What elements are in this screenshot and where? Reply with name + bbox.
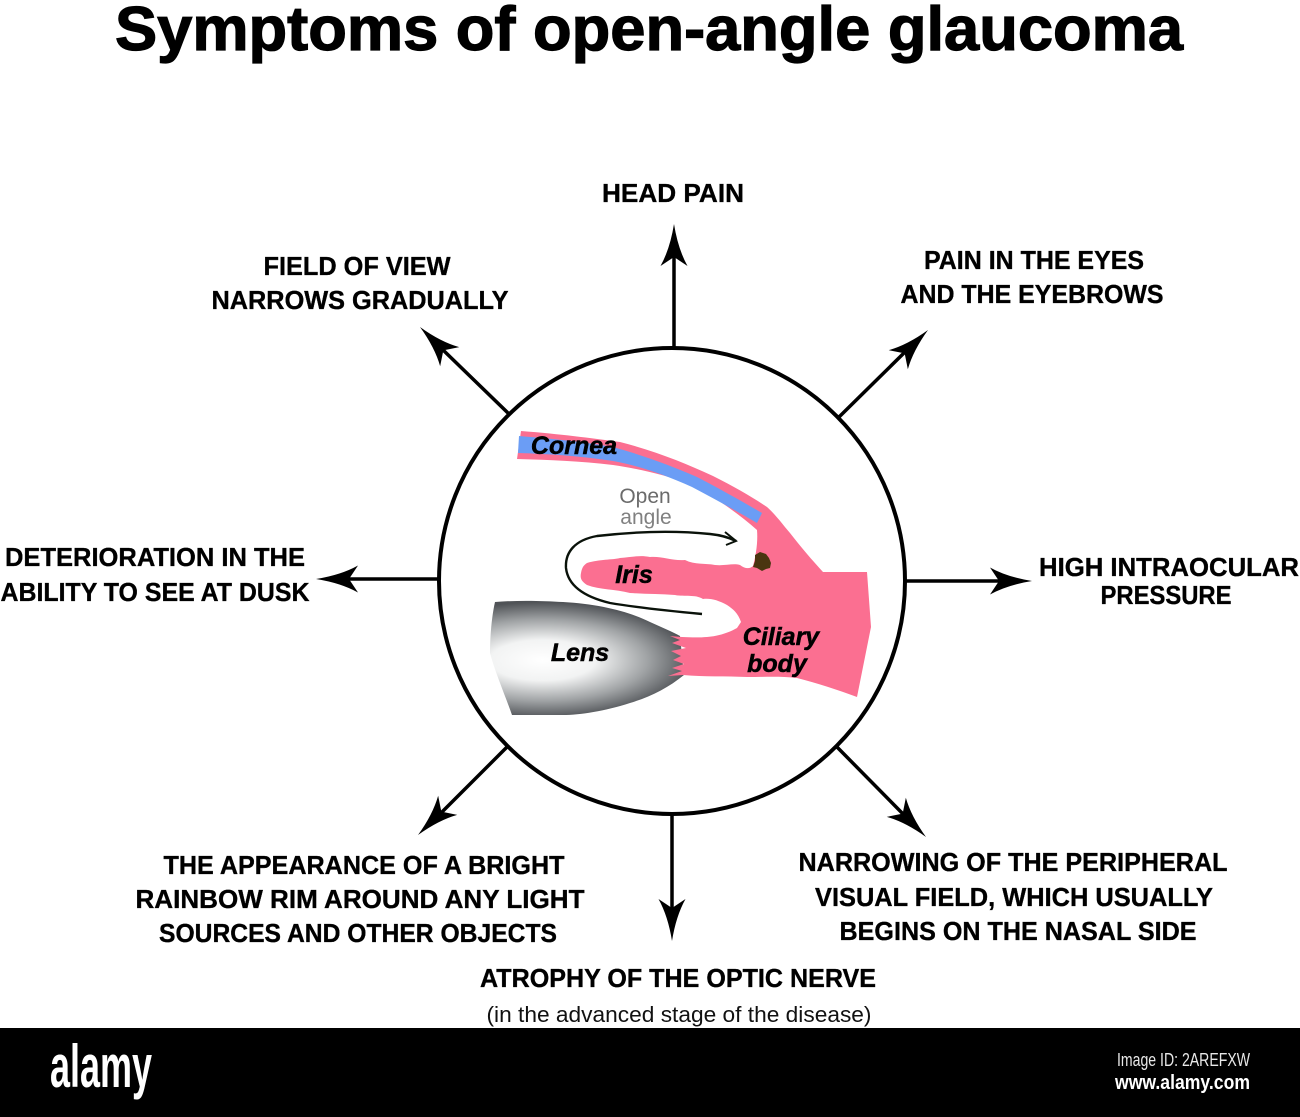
label: Lens: Lens <box>551 639 609 667</box>
label: Ciliary body: Ciliary <box>743 623 820 651</box>
label: Ciliary body: body <box>747 650 808 678</box>
label: peripheral narrowing <box>798 847 1228 946</box>
footer bar <box>0 1028 1300 1117</box>
label: peripheral narrowing: BEGINS ON THE NASAL SIDE <box>840 916 1196 946</box>
label: peripheral narrowing: VISUAL FIELD, WHICH USUALLY <box>815 882 1213 912</box>
alamy logo: alamy <box>50 1033 152 1100</box>
label: Iris: Iris <box>615 561 653 589</box>
trabecular blockage <box>753 552 771 571</box>
lens <box>490 601 684 715</box>
label: pain in the eyes: PAIN IN THE EYES <box>924 245 1144 275</box>
label: rainbow rim <box>136 850 585 948</box>
label: head pain: HEAD PAIN <box>602 178 744 208</box>
central circle <box>439 348 905 814</box>
arrow: right <box>905 568 1032 594</box>
label: deterioration at dusk <box>0 542 310 607</box>
arrow: left <box>316 566 439 592</box>
label: Cornea: Cornea <box>531 432 617 460</box>
label: rainbow rim: SOURCES AND OTHER OBJECTS <box>159 918 557 948</box>
label: rainbow rim: THE APPEARANCE OF A BRIGHT <box>164 850 565 880</box>
eye anatomy diagram <box>490 431 871 715</box>
label: rainbow rim: RAINBOW RIM AROUND ANY LIGHT <box>136 884 585 914</box>
label: pain in the eyes <box>900 245 1164 309</box>
label: high intraocular pressure: PRESSURE <box>1100 580 1232 610</box>
arrow: lower left <box>408 747 507 845</box>
arrow: upper right <box>838 320 938 418</box>
label: peripheral narrowing: NARROWING OF THE PERIPHERAL <box>798 847 1228 877</box>
label: field of view: NARROWS GRADUALLY <box>212 285 508 315</box>
arrow: down <box>658 815 686 941</box>
cornea blue layer <box>518 436 762 523</box>
label: Open angle <box>619 485 672 529</box>
label: Ciliary body <box>743 623 820 678</box>
open angle arrow <box>566 532 736 614</box>
label: Open angle: Open <box>619 485 671 508</box>
arrow: upper left <box>410 317 509 414</box>
label: Open angle: angle <box>620 506 672 529</box>
arrow: up <box>660 224 688 348</box>
arrow: lower right <box>836 746 936 847</box>
label: field of view <box>212 251 508 315</box>
label: field of view: FIELD OF VIEW <box>264 251 451 281</box>
label: deterioration at dusk: DETERIORATION IN THE <box>5 542 305 572</box>
label: optic nerve atrophy <box>480 963 876 1027</box>
label: optic nerve atrophy: (in the advanced stage of the disease) <box>486 1002 872 1027</box>
ciliary body, iris and cornea tissue <box>517 431 871 697</box>
label: deterioration at dusk: ABILITY TO SEE AT DUSK <box>0 577 310 607</box>
label: pain in the eyes: AND THE EYEBROWS <box>900 279 1164 309</box>
image id: Image ID: 2AREFXW <box>1117 1050 1250 1070</box>
website: www.alamy.com <box>1114 1072 1250 1094</box>
label: high intraocular pressure <box>1039 552 1299 610</box>
label: optic nerve atrophy: ATROPHY OF THE OPTIC NERVE <box>480 963 876 993</box>
label: high intraocular pressure: HIGH INTRAOCULAR <box>1039 552 1299 582</box>
